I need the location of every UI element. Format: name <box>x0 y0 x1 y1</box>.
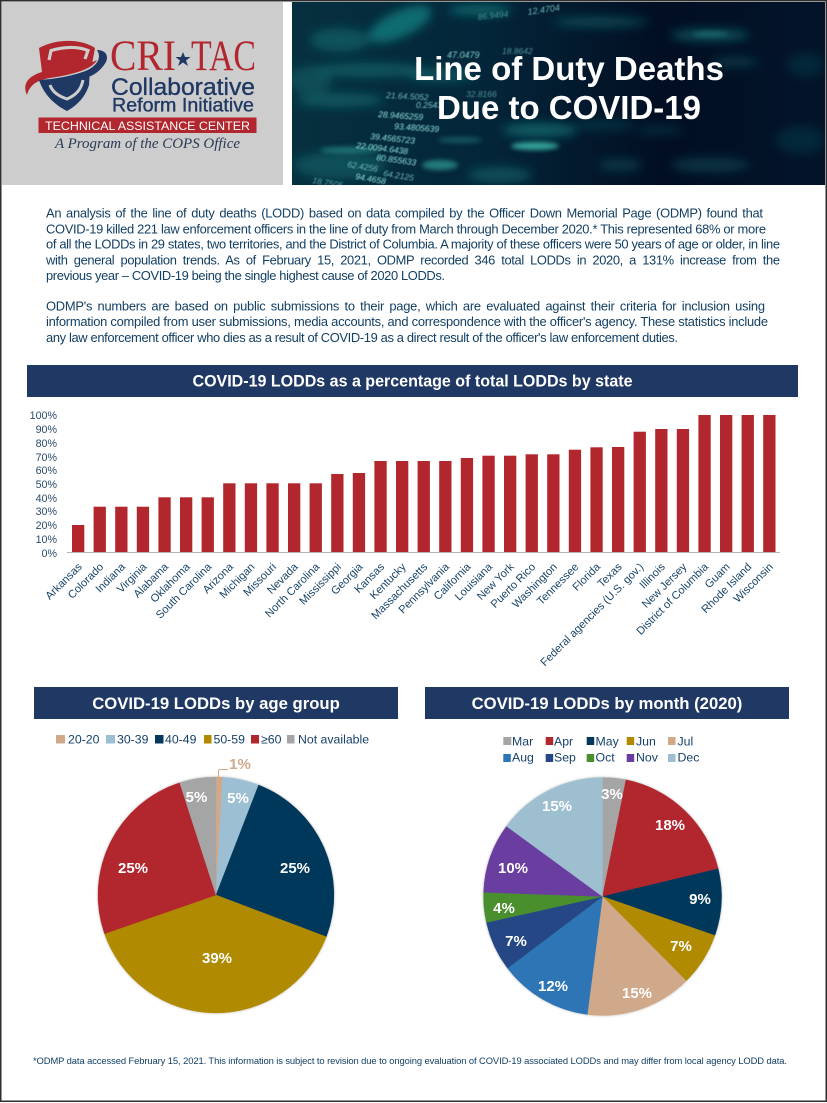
pie labels: age group: 5% <box>227 790 249 807</box>
x axis state labels: Arkansas <box>43 561 85 602</box>
title: Due to COVID-19 <box>437 89 701 126</box>
x axis state labels: Georgia <box>329 561 366 598</box>
background data numbers: 86.9494 <box>477 9 509 22</box>
pie labels: month: 12% <box>538 978 568 995</box>
pie labels: month: 3% <box>601 786 623 803</box>
x axis state labels: Colorado <box>66 561 106 601</box>
x axis state labels: Wisconsin <box>732 561 776 605</box>
x axis state labels: Federal agencies (U.S. gov.) <box>538 561 646 669</box>
legend: age group: 50-59 <box>214 732 245 746</box>
pie labels: age group: 25% <box>118 860 148 877</box>
background data numbers: 12.4704 <box>527 3 561 17</box>
x axis state labels: Arizona <box>201 561 236 596</box>
legend: month: Oct <box>596 750 615 764</box>
bar chart: LODDs by state <box>30 410 780 669</box>
title <box>414 50 724 126</box>
x axis state labels: Texas <box>596 561 625 590</box>
pie labels: month: 7% <box>505 933 527 950</box>
pie labels: age group: 39% <box>202 950 232 967</box>
pie labels: month <box>493 786 711 1002</box>
x axis state labels: Virginia <box>115 561 150 596</box>
logo text: Collaborative Reform Initiative: Reform Initiative <box>112 96 254 116</box>
pie labels: age group <box>118 756 310 967</box>
background data numbers: 94.4658 <box>355 171 387 186</box>
pie labels: age group: 25% <box>280 860 310 877</box>
x axis state labels: Indiana <box>94 561 128 595</box>
x axis state labels: Michigan <box>218 561 257 601</box>
text block: intro paragraph two: any law enforcement officer who dies as a result of COVID-19 as a direct result of the officer's law enforcement duties. <box>46 330 678 345</box>
legend: age group: ≥60 <box>261 732 282 746</box>
y axis labels: 70% <box>36 452 57 464</box>
background data numbers: 28.9465259 <box>377 109 424 122</box>
leader line for 1% <box>218 770 228 778</box>
background data numbers: 22.0094.6438 <box>355 140 409 156</box>
bars <box>72 415 776 552</box>
pie labels: age group: 5% <box>186 789 207 806</box>
text block: intro paragraph one: of all the LODDs in 29 states, two territories, and the District of Columbia. A majority of these officers were 50 years of age or older, in line <box>46 237 780 252</box>
text block: intro paragraph one: previous year – COVID-19 being the single highest cause of 2020 LODDs. <box>46 268 445 283</box>
x axis state labels: Oklahoma <box>148 561 193 605</box>
y axis labels: 10% <box>36 534 57 546</box>
logo wordmark: CRI-TAC <box>110 33 256 80</box>
x axis state labels: Rhode Island <box>699 561 754 616</box>
footnote: *ODMP data accessed February 15, 2021. This information is subject to revision due to ongoing evaluation of COVID-19 associated LODDs and may differ from local agency LODD data. <box>33 1055 787 1066</box>
text block: intro paragraph two: information compiled from user submissions, media accounts, and correspondence with the officer's agency. These statistics include <box>46 314 768 329</box>
y axis labels: 90% <box>36 424 57 436</box>
legend: month: Dec <box>678 750 699 764</box>
y axis labels: 50% <box>36 479 57 491</box>
legend: month: Mar <box>512 734 533 748</box>
background data numbers: 64.2125 <box>383 168 415 183</box>
logo tagline: A Program of the COPS Office <box>54 136 240 152</box>
title: Line of Duty Deaths <box>414 50 724 87</box>
logo text: Collaborative Reform Initiative: Collaborative <box>111 74 255 101</box>
legend: month: Apr <box>554 734 573 748</box>
heading: month band: COVID-19 LODDs by month (2020) <box>472 694 742 713</box>
x axis state labels: Puerto Rico <box>489 561 538 611</box>
background data numbers: 21.64.5052 <box>385 90 429 102</box>
x axis state labels: Louisiana <box>453 561 496 603</box>
logo text: Collaborative Reform Initiative <box>111 74 255 116</box>
legend: month: Jun <box>636 734 656 748</box>
x axis state labels: California <box>432 561 474 603</box>
logo wordmark: CRI-TAC: CRI <box>110 33 176 80</box>
heading: age group band <box>34 687 398 719</box>
x axis state labels: District of Columbia <box>635 561 712 638</box>
legend: age group: 40-49 <box>165 732 197 746</box>
icon: shield and swoosh <box>25 41 107 111</box>
heading: bar chart band <box>27 365 798 397</box>
background data numbers: 62.4256 <box>347 159 379 174</box>
x axis state labels: Pennsylvania <box>397 561 452 616</box>
pie labels: month: 15% <box>622 985 652 1002</box>
legend: age group: Not available <box>298 732 369 746</box>
legend: month: Nov <box>636 750 659 764</box>
panel: header image with title <box>288 0 825 190</box>
background data numbers: 93.4805639 <box>394 121 440 134</box>
x axis state labels: South Carolina <box>154 561 215 622</box>
y axis labels: 40% <box>36 493 57 505</box>
text block: intro paragraph one <box>45 206 780 283</box>
pie chart: age group <box>98 756 334 1013</box>
y axis labels: 100% <box>30 410 57 422</box>
x axis state labels: Missouri <box>241 561 279 599</box>
background data numbers <box>312 3 561 190</box>
y axis labels: 0% <box>42 548 57 560</box>
legend: month: Jul <box>678 734 693 748</box>
x axis state labels: Alabama <box>132 561 172 601</box>
y axis labels: 30% <box>36 506 57 518</box>
x axis state labels: Washington <box>510 561 560 611</box>
pie labels: month: 7% <box>670 938 692 955</box>
legend: month: Sep <box>554 750 576 764</box>
pie labels: month: 4% <box>493 900 515 917</box>
heading: age group band: COVID-19 LODDs by age group <box>92 694 340 713</box>
background data numbers: 18.8642 <box>502 46 533 56</box>
pie labels: month: 9% <box>689 891 711 908</box>
legend: age group: 20-20 <box>68 732 100 746</box>
x axis state labels: Florida <box>571 561 604 594</box>
text block: intro paragraph one: COVID-19 killed 221 law enforcement officers in the line of duty from March through December 2020.* This represented 68% or more <box>46 221 766 236</box>
pie labels: month: 15% <box>542 798 572 815</box>
x axis state labels: Kansas <box>352 561 387 596</box>
x axis state labels: Illinois <box>638 561 668 591</box>
logo banner: technical assistance center: TECHNICAL ASSISTANCE CENTER <box>45 119 250 133</box>
x axis state labels: Mississippi <box>297 561 344 608</box>
x axis state labels <box>43 561 776 669</box>
y axis labels: 20% <box>36 520 57 532</box>
text block: intro paragraph one: An analysis of the line of duty deaths (LODD) based on data compiled by the Officer Down Memorial Page (ODMP) found that <box>46 206 763 220</box>
background data numbers: 18.7505 <box>312 175 344 190</box>
x axis state labels: Massachusetts <box>369 561 431 622</box>
panel: logo <box>2 2 283 185</box>
legend: month: May <box>596 734 620 748</box>
pie labels: month: 10% <box>498 860 528 877</box>
legend: month: Aug <box>512 750 534 764</box>
y axis labels <box>30 410 57 560</box>
heading: month band <box>425 687 789 719</box>
x axis state labels: Kentucky <box>368 561 409 602</box>
pie labels: month: 18% <box>655 817 685 834</box>
y axis labels: 60% <box>36 465 57 477</box>
background data numbers: 47.0479 <box>447 50 480 60</box>
x axis state labels: Guam <box>703 561 733 591</box>
background data numbers: 39.4565723 <box>370 131 416 146</box>
legend: age group: 30-39 <box>117 732 149 746</box>
x axis state labels: Tennessee <box>535 561 581 608</box>
x axis state labels: Nevada <box>265 561 301 597</box>
pie labels: age group: 1% <box>229 756 251 773</box>
x axis state labels: North Carolina <box>263 561 323 620</box>
pie chart: month <box>484 777 721 1015</box>
legend: age group <box>56 732 369 746</box>
x axis state labels: New Jersey <box>640 561 690 611</box>
legend: month <box>503 734 699 764</box>
heading: bar chart band: COVID-19 LODDs as a percentage of total LODDs by state <box>192 372 632 390</box>
background data numbers: 32.8166 <box>466 89 497 99</box>
background data numbers: 80.855633 <box>376 152 417 168</box>
y axis labels: 80% <box>36 438 57 450</box>
logo wordmark: CRI-TAC: TAC <box>191 33 256 80</box>
x axis state labels: New York <box>475 561 517 603</box>
text block: intro paragraph two: ODMP's numbers are based on public submissions to their page, which are evaluated against their criteria for inclusion using <box>46 299 765 314</box>
text block: intro paragraph two <box>46 299 768 345</box>
text block: intro paragraph one: with general population trends. As of February 15, 2021, ODMP recorded 346 total LODDs in 2020, a 131% increase from the <box>45 253 780 268</box>
background data numbers: 0.2543 <box>416 100 442 110</box>
